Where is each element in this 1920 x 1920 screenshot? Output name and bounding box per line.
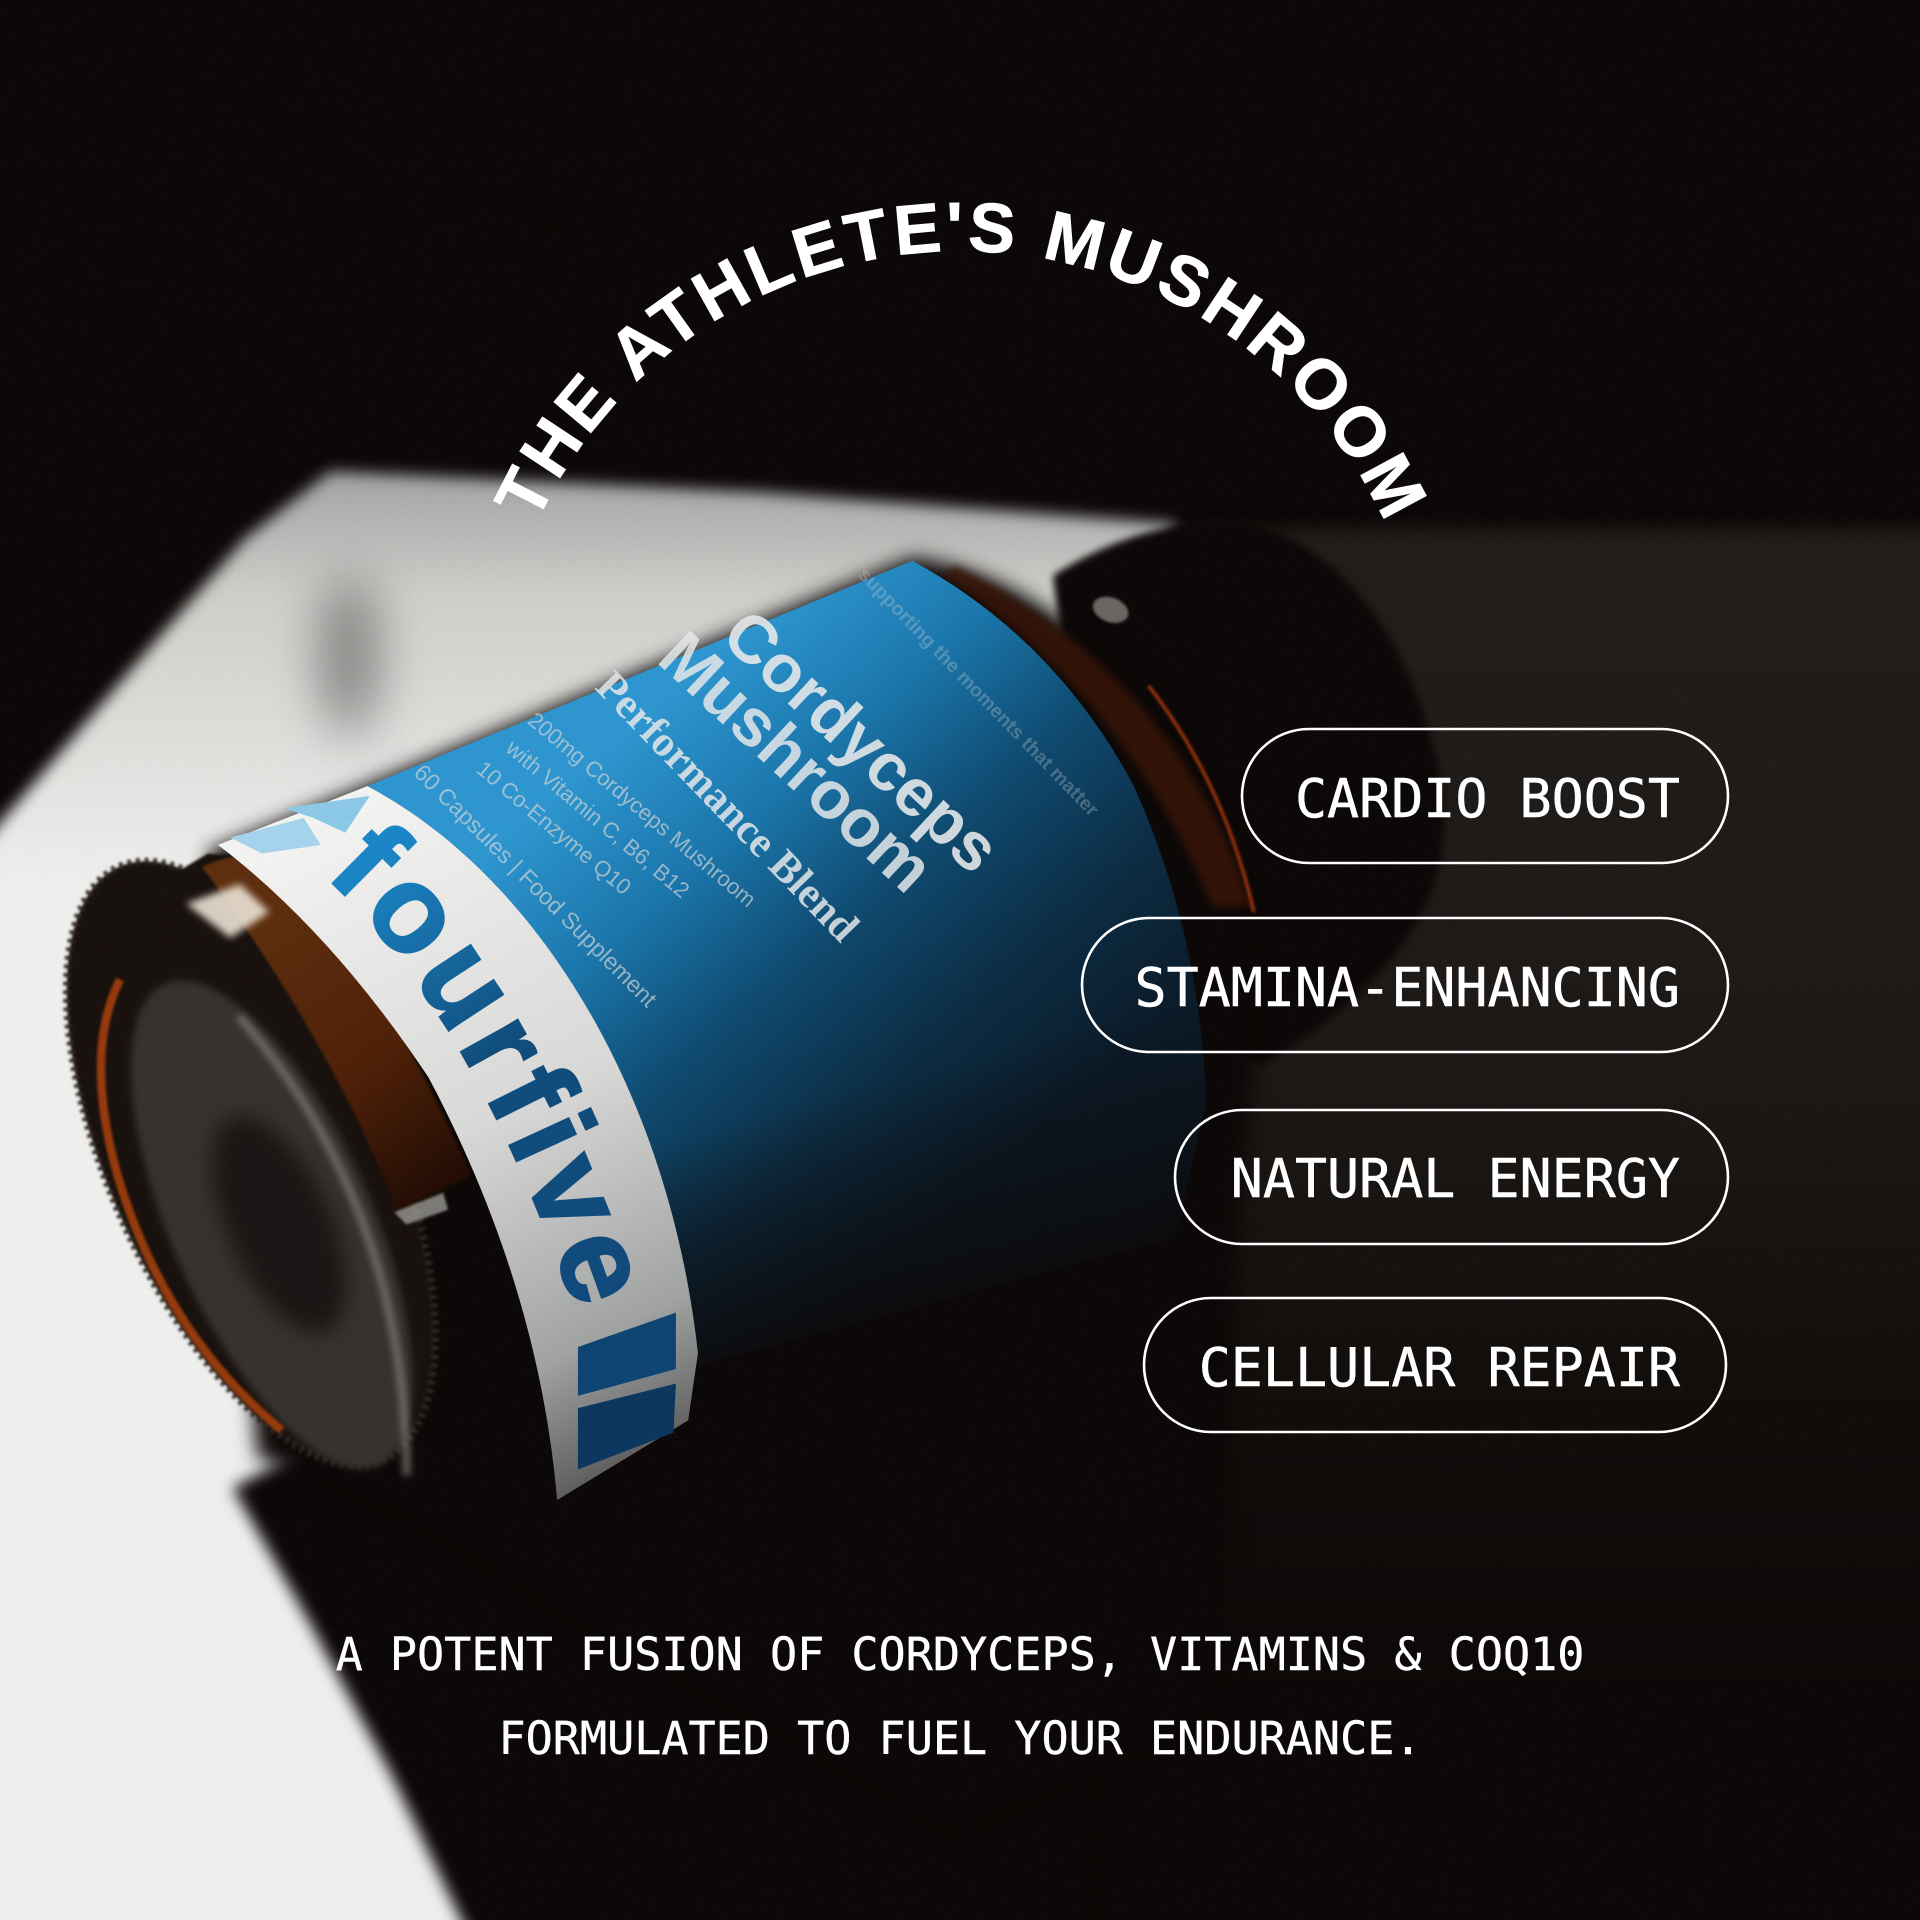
closing statement: A POTENT FUSION OF CORDYCEPS, VITAMINS & COQ10 [336, 1628, 1584, 1681]
product name: Cordyceps [709, 595, 1014, 887]
disc pattern [185, 1097, 373, 1352]
pill: cellular repair: CELLULAR REPAIR [1199, 1337, 1681, 1399]
bottle cap silhouette [1053, 520, 1444, 1065]
pill: stamina-enhancing [1082, 918, 1728, 1052]
disc highlight edge [239, 1016, 407, 1476]
label: bottom stripes [578, 1313, 676, 1469]
label: white band [218, 786, 698, 1500]
ingredients: 200mg Cordyceps Mushroom [523, 707, 761, 912]
base top shoulder [86, 853, 294, 1029]
brand wordmark: fourfive [331, 825, 630, 1302]
ingredients: 10 Co-Enzyme Q10 [472, 756, 636, 900]
closing statement: FORMULATED TO FUEL YOUR ENDURANCE. [498, 1712, 1422, 1765]
pill: cardio boost [1242, 729, 1728, 863]
amber rim of shoulder [943, 566, 1251, 906]
shaded wall on right [1102, 529, 1920, 1920]
orange inner rim [101, 980, 282, 1430]
white cloth surface [0, 471, 1176, 1920]
pill: natural energy [1175, 1110, 1728, 1244]
cap highlight [1089, 592, 1132, 628]
dark glass body and its shadow [208, 557, 1256, 1837]
bottle base outer ring [0, 810, 512, 1517]
ingredients: 60 Capsules | Food Supplement [409, 759, 662, 1012]
pill: stamina-enhancing: STAMINA-ENHANCING [1134, 957, 1680, 1019]
label: blue falloff [367, 561, 1206, 1365]
label: blue panel [367, 561, 1206, 1365]
inner disc [73, 943, 471, 1506]
closing statement [336, 1628, 1584, 1765]
bottle [61, 523, 1444, 1500]
ingredients: with Vitamin C, B6, B12 [501, 735, 694, 903]
product subtitle: Performance Blend [587, 662, 868, 951]
pill: cardio boost: CARDIO BOOST [1295, 768, 1680, 830]
amber rim highlight [1149, 686, 1254, 912]
title arc: THE ATHLETE'S MUSHROOM [493, 202, 1427, 519]
soft shadow on cloth [320, 576, 378, 735]
label: top stripes [230, 796, 370, 853]
ingredients: supporting the moments that matter [854, 564, 1103, 821]
amber glass near base [202, 855, 471, 1212]
glass glare [186, 884, 269, 938]
pill: natural energy: NATURAL ENERGY [1231, 1148, 1680, 1210]
pill: cellular repair [1144, 1298, 1726, 1432]
ingredients [409, 564, 1103, 1012]
metal glint [394, 1193, 448, 1224]
bottle: Mushroom [645, 617, 948, 907]
